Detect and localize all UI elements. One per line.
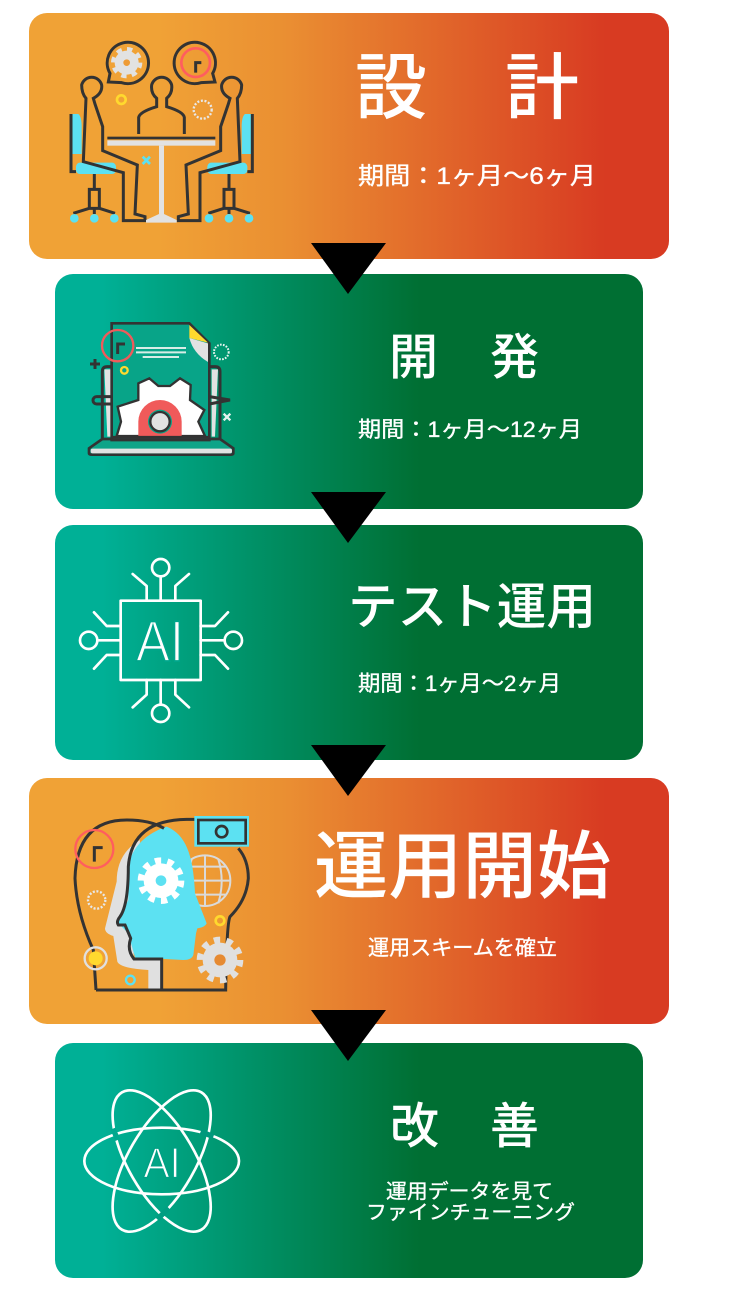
text: improvement description: ファインチューニング	[366, 1201, 575, 1224]
panel: design	[29, 13, 669, 259]
heading: test operation: テスト運用	[348, 579, 596, 635]
text: improvement description	[366, 1180, 575, 1224]
arrow 4	[311, 1010, 386, 1061]
heading: design	[355, 49, 579, 129]
heading: start of operation: 運用開始	[314, 825, 611, 908]
text: development period: 期間：1ヶ月〜12ヶ月	[358, 417, 582, 442]
icon: AI chip	[80, 559, 242, 722]
panel: improvement	[55, 1043, 643, 1278]
heading: improvement: 善	[490, 1100, 539, 1154]
panel background: start of operation	[29, 778, 669, 1024]
panel: test operation	[55, 525, 643, 760]
heading: improvement: 改	[390, 1100, 439, 1154]
icon: AI atom	[84, 1076, 239, 1246]
text: operation scheme: 運用スキームを確立	[368, 937, 557, 960]
arrow 1	[311, 243, 386, 294]
heading: development	[389, 331, 539, 385]
panel background: test operation	[55, 525, 643, 760]
icon: document gear laptop	[89, 323, 233, 455]
heading: development: 開	[389, 331, 438, 385]
heading: development: 発	[490, 331, 539, 385]
panel: start of operation	[29, 778, 669, 1024]
icon: head with gears	[75, 816, 249, 990]
heading: improvement	[390, 1100, 539, 1154]
icon: meeting at table	[70, 42, 253, 223]
panel background: development	[55, 274, 643, 509]
heading: design: 設	[355, 49, 427, 129]
icon: AI chip: AI	[136, 610, 184, 674]
text: test period: 期間：1ヶ月〜2ヶ月	[358, 671, 561, 696]
arrow 2	[311, 492, 386, 543]
arrow 3	[311, 745, 386, 796]
panel: development	[55, 274, 643, 509]
text: improvement description: 運用データを見て	[386, 1180, 553, 1203]
panel background: improvement	[55, 1043, 643, 1278]
heading: design: 計	[505, 49, 579, 129]
icon: AI atom: AI	[143, 1140, 181, 1188]
text: design period: 期間：1ヶ月〜6ヶ月	[358, 163, 596, 190]
panel background: design	[29, 13, 669, 259]
